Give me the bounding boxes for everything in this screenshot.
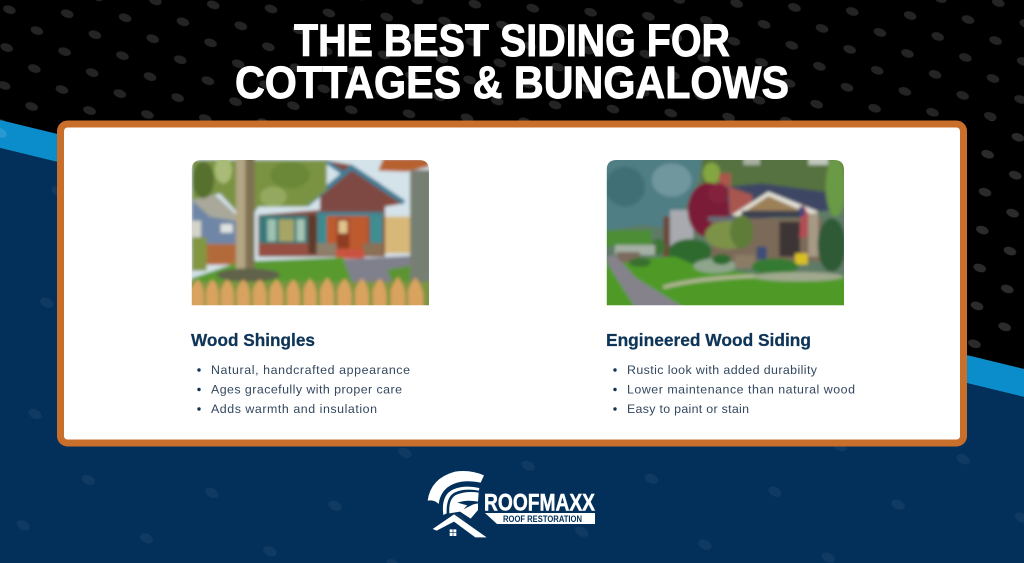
title: THE BEST SIDING FOR [294, 15, 730, 66]
photo: engineered wood bungalow [606, 160, 844, 306]
list: wood shingles benefits: Natural, handcrafted appearance [211, 363, 410, 377]
list: engineered wood benefits: Lower maintenance than natural wood [627, 382, 855, 396]
wordmark: ROOFMAXX [484, 490, 596, 516]
list: wood shingles benefits [197, 363, 410, 416]
title: COTTAGES & BUNGALOWS [235, 57, 789, 108]
heading: engineered wood siding: Engineered Wood Siding [606, 330, 811, 350]
title [235, 15, 789, 108]
list: wood shingles benefits: Adds warmth and insulation [211, 402, 377, 416]
list: engineered wood benefits [613, 363, 855, 416]
photo: wood shingles cottage [192, 160, 429, 306]
list: wood shingles benefits: Ages gracefully with proper care [211, 382, 402, 396]
list: engineered wood benefits: Easy to paint or stain [627, 402, 749, 416]
panel: siding options [60, 124, 964, 443]
heading: wood shingles: Wood Shingles [191, 330, 315, 350]
banner: roof restoration [485, 513, 595, 524]
icon: helmet and roof [428, 471, 487, 537]
list: engineered wood benefits: Rustic look with added durability [627, 363, 818, 377]
logo: RoofMaxx: ROOF RESTORATION [503, 514, 582, 525]
logo: RoofMaxx [428, 471, 596, 537]
